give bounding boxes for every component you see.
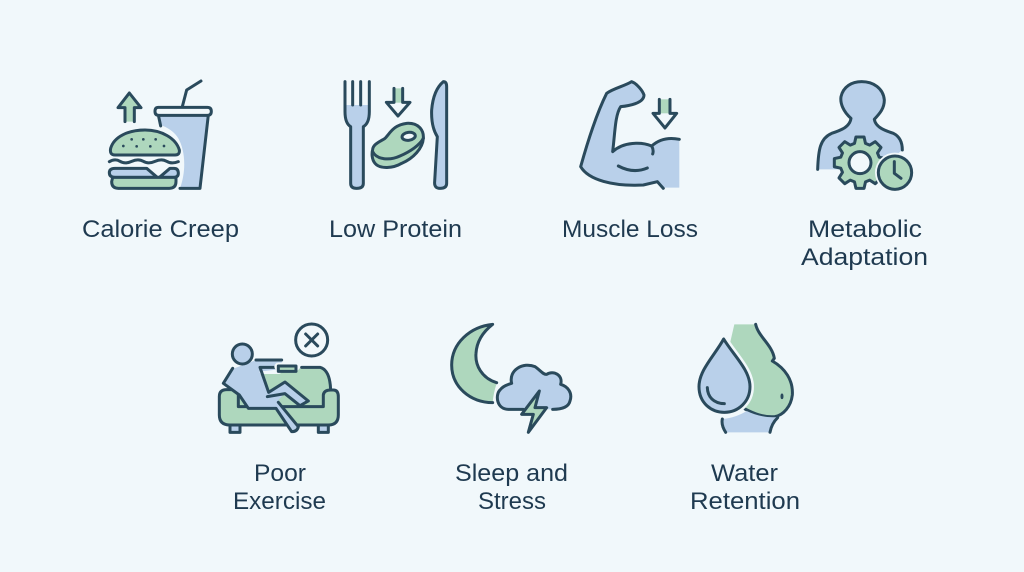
label: Poor Exercise <box>233 460 326 515</box>
panel: low protein <box>329 82 462 243</box>
icon: person reclining on sofa with X badge <box>219 324 338 432</box>
panel: metabolic adaptation <box>801 82 928 271</box>
panel: poor exercise <box>219 324 338 515</box>
panel: sleep and stress <box>452 324 571 515</box>
label: Sleep and Stress <box>455 460 568 515</box>
icon: burger and drink with up arrow <box>109 81 211 188</box>
icon: water drop and bloated belly <box>699 324 792 432</box>
label: Poor Exercise: Exercise <box>233 488 326 515</box>
label: Low Protein: Low Protein <box>329 216 462 243</box>
label: Poor Exercise: Poor <box>254 460 306 487</box>
panel: water retention <box>690 324 800 515</box>
label: Metabolic Adaptation <box>801 216 928 271</box>
label: Metabolic Adaptation: Metabolic <box>808 216 922 243</box>
label: Water Retention: Retention <box>690 488 800 515</box>
icon: fork, knife and steak with down arrow <box>345 82 447 188</box>
label: Muscle Loss: Muscle Loss <box>562 216 698 243</box>
icon: flexed arm with down arrow <box>581 82 679 188</box>
label: Water Retention <box>690 460 800 515</box>
label: Metabolic Adaptation: Adaptation <box>801 244 928 271</box>
label: Water Retention: Water <box>711 460 778 487</box>
icon: crescent moon and storm cloud <box>452 324 571 432</box>
panel: calorie creep <box>82 81 239 243</box>
panel: muscle loss <box>562 82 698 243</box>
icon: person with gear and clock <box>818 82 915 193</box>
label: Calorie Creep: Calorie Creep <box>82 216 239 243</box>
label: Sleep and Stress: Stress <box>478 488 546 515</box>
label: Sleep and Stress: Sleep and <box>455 460 568 487</box>
